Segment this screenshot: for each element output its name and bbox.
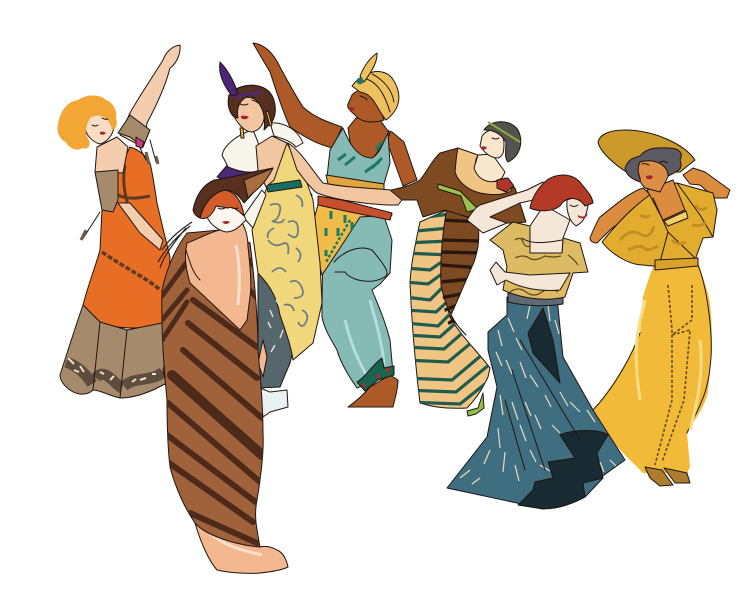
figure: woman in striped dress with brown jacket [391, 122, 526, 416]
illustration: seven dancing women [58, 42, 730, 574]
figure: front woman in brown striped wrap [158, 168, 288, 573]
figure: woman in orange dress with blonde curls [57, 45, 180, 398]
figure: woman in yellow dress with wide hat [590, 130, 730, 486]
figure: woman in turban and teal harem trousers [253, 43, 417, 407]
figure: woman with purple feather and yellow gown [217, 62, 402, 417]
figure: woman with red hair and teal skirt [447, 175, 625, 509]
